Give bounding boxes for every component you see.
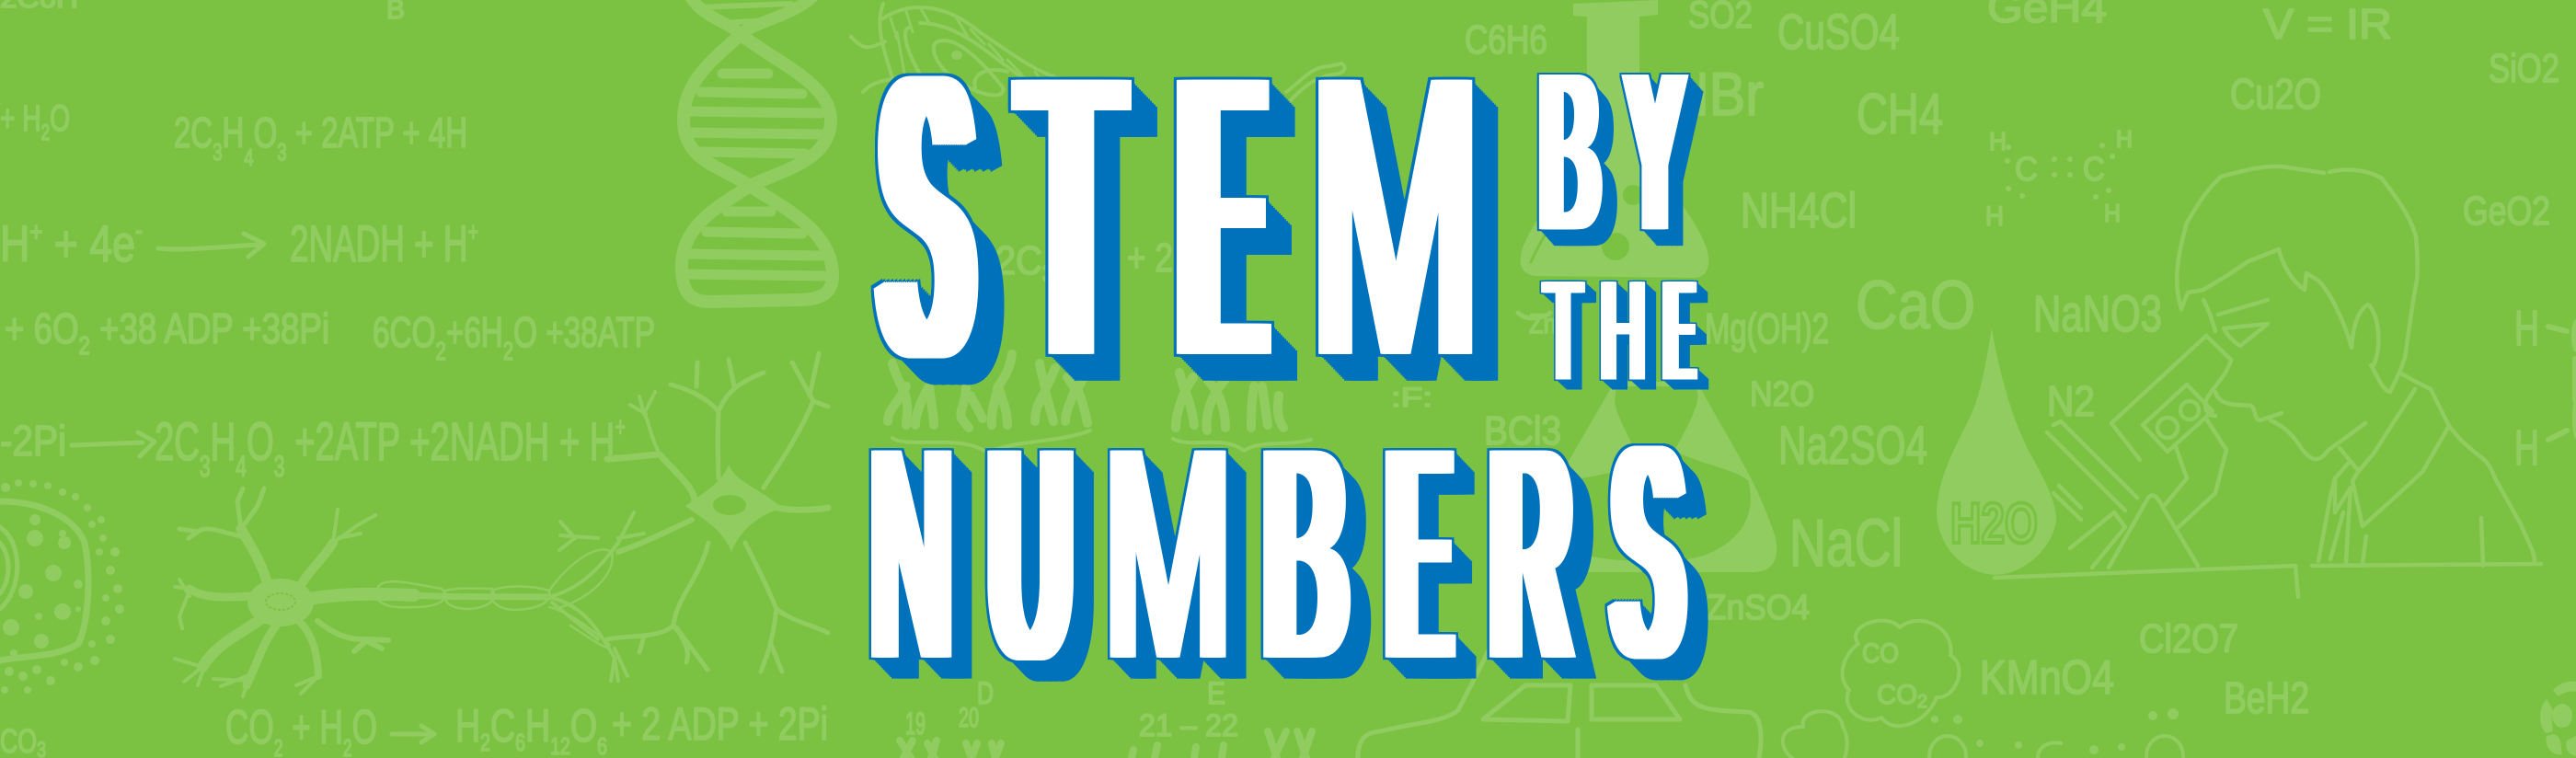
icon: scientist with microscope <box>1995 167 2541 597</box>
heading word: NUMBERS <box>868 385 1708 724</box>
right side chemical formulas: 3 <box>1042 259 1054 287</box>
right side chemical formulas: ZnSO4 <box>1707 589 1810 627</box>
heading word: STEM: T <box>1023 0 1120 442</box>
hair and head <box>2177 167 2418 392</box>
left chemical equations: H <box>455 700 489 752</box>
icon: CO CO2 clouds: CO <box>1862 638 1899 669</box>
left chemical equations: O <box>247 412 274 472</box>
right side chemical formulas: BCl3 <box>1484 408 1561 454</box>
title: STEM by the Numbers <box>868 0 1709 724</box>
left chemical equations: +2ATP +2NADH + H <box>285 412 615 472</box>
right side chemical formulas: BeH2 <box>2224 674 2309 723</box>
left chemical equations: CO <box>225 701 297 754</box>
left chemical equations: + H <box>282 701 343 754</box>
left chemical equations: + <box>29 217 42 247</box>
icon: conical flask bottom <box>1555 382 1777 572</box>
left chemical equations: H <box>525 700 550 752</box>
right side chemical formulas <box>995 0 2559 723</box>
icon: cell <box>0 479 124 694</box>
left chemical equations: 6 <box>515 729 525 756</box>
left chemical equations: 3 <box>200 450 211 483</box>
ethylene lewis structure: H <box>2104 199 2121 227</box>
left chemical equations: 6CO <box>373 308 460 356</box>
right side chemical formulas: CuSO4 <box>1777 5 1900 60</box>
right side chemical formulas: Cu2O <box>2230 70 2321 118</box>
left chemical equations: 3 <box>274 450 285 483</box>
left chemical equations: 2 <box>480 729 490 756</box>
icon: neuron right <box>607 353 828 672</box>
heading word: THE: H <box>1601 251 1645 410</box>
microscope <box>1995 336 2298 597</box>
left chemical equations: + H <box>0 98 58 139</box>
ethylene lewis structure: H <box>1989 127 2007 155</box>
left chemical equations: 3 <box>213 138 222 166</box>
icon: CO CO2 clouds: CO <box>1877 680 1918 710</box>
left chemical equations: - <box>135 215 143 246</box>
icon: DNA helix <box>682 0 833 302</box>
right side chemical formulas: C6H6 <box>1465 17 1547 63</box>
right edge lewis structure: H <box>2514 420 2539 476</box>
left chemical equations: 2C <box>174 109 228 156</box>
heading word: STEM: M <box>1310 0 1480 442</box>
right side chemical formulas: :F: <box>1391 383 1432 413</box>
left chemical equations: H <box>0 214 37 272</box>
right side chemical formulas: NaCl <box>1789 507 1903 580</box>
icon: chromosomes bottom: D <box>977 676 994 711</box>
left chemical equations: 3 <box>277 138 287 166</box>
left chemical equations: 2C <box>155 412 223 472</box>
left chemical equations: O +38ATP <box>513 308 655 356</box>
right side chemical formulas: Zn <box>1529 309 1557 339</box>
ethylene lewis structure <box>1985 125 2133 232</box>
left chemical equations: + 2 ADP + 2Pi <box>612 698 828 750</box>
heading word: NUMBERS: U <box>990 387 1070 724</box>
right side chemical formulas: N2O <box>1750 375 1814 414</box>
right side chemical formulas: GeO2 <box>2463 189 2550 234</box>
ethylene lewis structure: H <box>1985 201 2004 232</box>
left chemical equations: 4 <box>244 144 254 171</box>
left chemical equations: -2Pi <box>0 417 66 465</box>
heading word: NUMBERS: S <box>1615 385 1681 723</box>
left chemical equations: 2 <box>78 331 90 360</box>
right side chemical formulas: 2C <box>995 238 1047 283</box>
ethylene lewis structure: C <box>2083 150 2105 188</box>
left chemical equations: +38 ADP +38Pi <box>90 304 329 352</box>
left chemical equations: +6H <box>446 308 503 356</box>
heading word: THE: E <box>1665 251 1693 410</box>
heading word: NUMBERS: N <box>871 387 951 724</box>
CO2 lewis structure <box>1929 708 2183 758</box>
icon: chromosomes bottom: 19 <box>905 706 926 741</box>
ethylene lewis structure: C <box>2015 150 2038 188</box>
left chemical equations: O <box>254 109 277 156</box>
left chemical equations: + 6O <box>5 304 98 352</box>
icon: chromosomes bottom: E <box>1207 676 1225 711</box>
left chemical equations: + 2ATP + 4H <box>287 109 467 156</box>
icon: flower <box>2540 682 2576 756</box>
left chemical equations: + <box>615 412 626 442</box>
icon: conical flask top <box>1521 0 1708 278</box>
icon: chromosomes bottom: 20 <box>959 703 979 733</box>
right side chemical formulas: Na2SO4 <box>1778 416 1927 476</box>
icon: chromosomes bottom: 21 – 22 <box>1139 708 1238 743</box>
right side chemical formulas: CaO <box>1856 267 1975 343</box>
heading word: BY: B <box>1540 28 1599 279</box>
ethylene lewis structure: H <box>2116 125 2133 153</box>
left chemical equations: + 4e <box>42 214 135 272</box>
icon: chromosomes <box>888 313 1550 453</box>
right edge lewis structure: H <box>2514 301 2539 356</box>
right side chemical formulas: Mg(OH)2 <box>1705 304 1829 352</box>
right side chemical formulas: NaNO3 <box>2033 284 2162 342</box>
heading word: NUMBERS: R <box>1492 387 1570 724</box>
left chemical equations: 2 <box>435 337 446 365</box>
left chemical equations: C <box>490 700 515 752</box>
heading word: BY: Y <box>1629 28 1681 279</box>
heading word: STEM: S <box>884 0 969 442</box>
left chemical equations: 4 <box>236 450 247 483</box>
right side chemical formulas: CH4 <box>1857 83 1943 146</box>
right side chemical formulas: KMnO4 <box>1980 651 2114 705</box>
lab coat <box>2312 382 2541 566</box>
heading word: NUMBERS: E <box>1391 387 1447 724</box>
icon: chromosomes bottom <box>900 676 1312 758</box>
left chemical equations: 2 <box>41 121 50 145</box>
icon: water drop H2O: H2O <box>1950 492 2038 556</box>
heading word: THE <box>1540 251 1709 410</box>
right side chemical formulas: NBr <box>1670 60 1764 128</box>
left chemical equations: 2 <box>503 337 513 365</box>
left chemical equations: 2NADH + H <box>290 214 560 272</box>
icon: CO CO2 clouds <box>1783 621 1959 758</box>
icon: CO CO2 clouds: 2 <box>1917 692 1927 712</box>
heading word: NUMBERS: B <box>1264 387 1346 724</box>
icon: lab tubing <box>1358 626 1761 758</box>
heading word: BY <box>1536 28 1704 279</box>
heading word: NUMBERS: M <box>1104 387 1232 724</box>
face <box>2203 300 2365 459</box>
heading word: STEM <box>870 0 1498 442</box>
left chemical equations: H <box>211 412 236 472</box>
right side chemical formulas: N2 <box>2047 377 2095 425</box>
right side chemical formulas: SiO2 <box>2489 46 2559 91</box>
left chemical equations <box>0 0 828 758</box>
left chemical equations: H <box>222 109 244 156</box>
icon: water drop H2O <box>1937 328 2056 575</box>
icon: plant cell <box>851 4 1345 110</box>
left chemical equations: O <box>570 700 597 752</box>
left chemical equations: O <box>50 98 70 139</box>
left chemical equations: + <box>467 217 478 247</box>
right side chemical formulas: Cl2O7 <box>2139 616 2238 661</box>
right side chemical formulas: V = IR <box>2263 0 2392 48</box>
right side chemical formulas: NH4Cl <box>1741 183 1857 238</box>
heading word: THE: T <box>1545 251 1581 410</box>
left chemical equations: O <box>352 701 377 754</box>
icon: neuron left <box>175 488 644 696</box>
right side chemical formulas: + 2 <box>1127 235 1173 281</box>
right edge lewis structure <box>2514 301 2576 476</box>
heading word: STEM: E <box>1184 0 1259 442</box>
